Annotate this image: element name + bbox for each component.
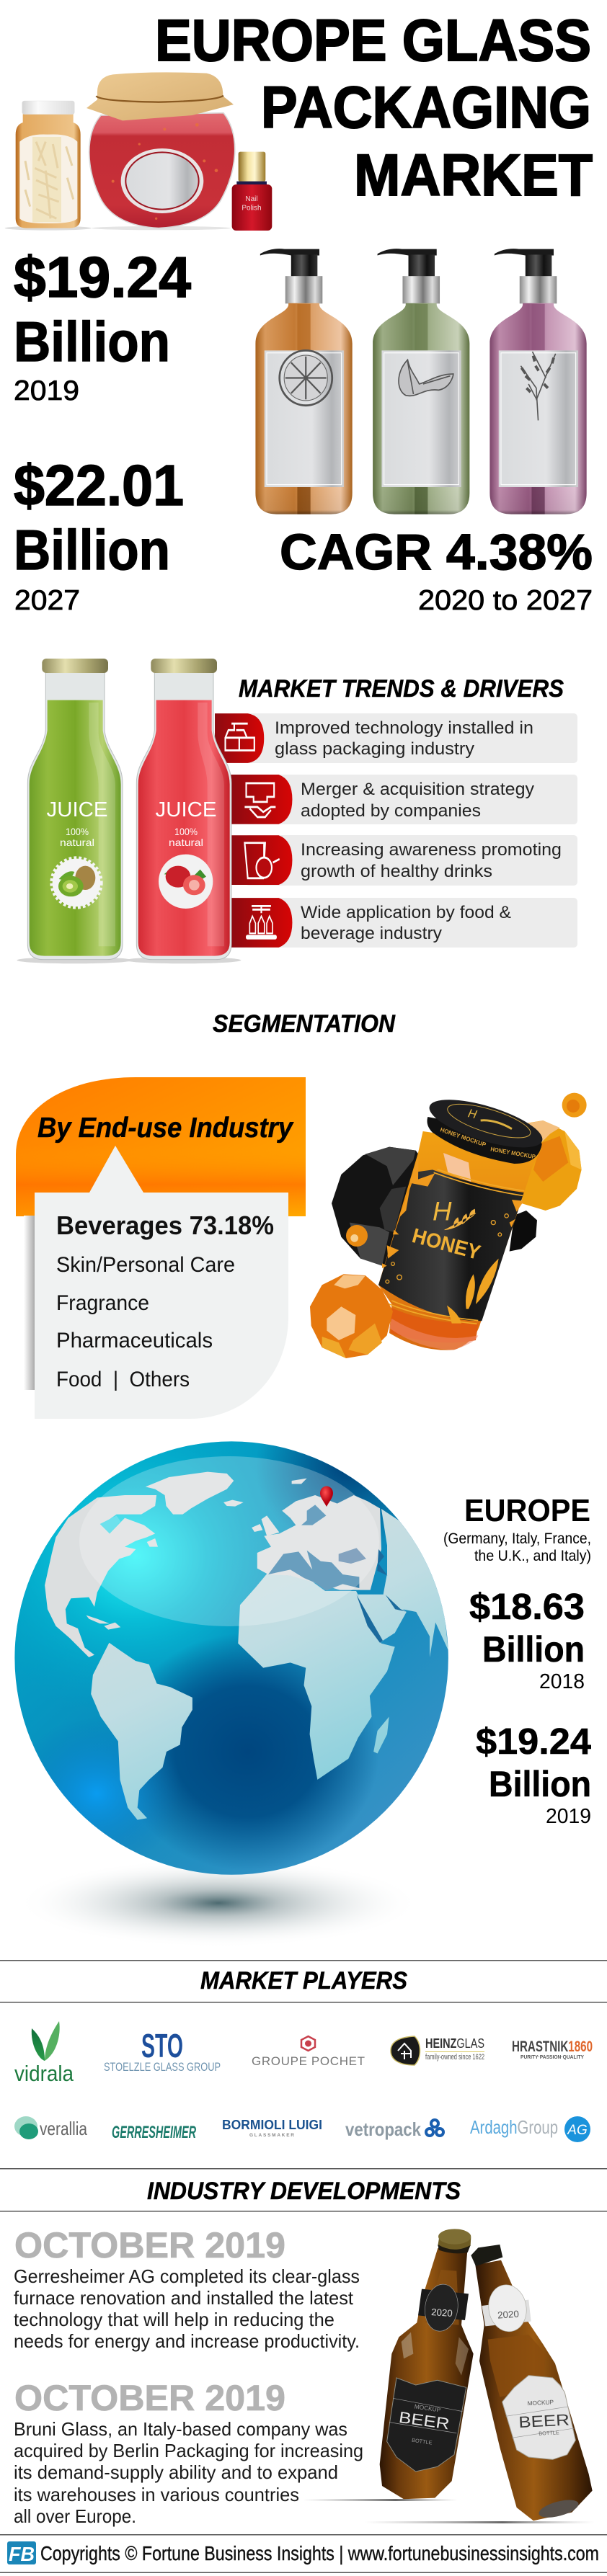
label: green juice text: natural: [60, 837, 94, 848]
driver row 3: growth of healthy drinks: [301, 862, 492, 881]
illustration: nail polish: Nail: [245, 195, 258, 203]
panel: development 2: its demand-supply ability and to expand: [14, 2461, 338, 2483]
jar label: H: [433, 1196, 452, 1226]
logo: vidrala: [14, 2021, 74, 2086]
label: red juice text: [156, 798, 216, 848]
jar label: [378, 1154, 524, 1324]
heading: market trends and drivers: MARKET TRENDS & DRIVERS: [239, 675, 564, 703]
logo: heinz glas: family-owned since 1622: [425, 2053, 484, 2062]
stat: 2027 market value: $22.01: [14, 453, 184, 517]
logo: bormioli luigi: BORMIOLI LUIGI: [222, 2118, 322, 2132]
highlight: [79, 1456, 379, 1626]
icon: bottling conveyor: [231, 898, 292, 948]
icon: glass and apple: [231, 835, 292, 885]
driver row 2: Merger & acquisition strategy: [301, 780, 534, 799]
logo: bormioli luigi: GLASSMAKER: [249, 2133, 294, 2138]
driver row 1: glass packaging industry: [275, 739, 474, 759]
panel: development 1: Gerresheimer AG completed its clear-glass: [14, 2265, 360, 2287]
label: red juice text: 100%: [174, 826, 198, 837]
logo: stoelzle: [104, 2027, 221, 2074]
illustration: red juice bottle: [125, 659, 241, 963]
2019 value: 2019: [546, 1805, 591, 1828]
illustration: pill bottle: [5, 101, 92, 231]
2019 value: Billion: [489, 1764, 591, 1804]
panel: development 1: needs for energy and increase productivity.: [14, 2330, 360, 2352]
panel: development 2: OCTOBER 2019: [14, 2378, 285, 2418]
logo: ardagh group: AG: [567, 2123, 588, 2138]
logo: ardagh group: ArdaghGroup: [470, 2116, 558, 2138]
segment list: Beverages 73.18%: [56, 1211, 274, 1240]
white card with pointer: [35, 1146, 288, 1419]
illustration: black label beer bottle: 2020: [431, 2307, 453, 2319]
segment list: Food | Others: [56, 1368, 190, 1391]
neck label: [418, 2289, 469, 2320]
label: green juice text: [46, 798, 108, 848]
stat: CAGR: [280, 524, 593, 616]
stat: 2019 market value: Billion: [14, 310, 170, 373]
heading: segmentation: SEGMENTATION: [213, 1010, 396, 1038]
map: continents south: [91, 1509, 448, 1820]
text: europe stats: [443, 1493, 592, 1828]
logo: vidrala: vidrala: [14, 2061, 74, 2086]
jar lid: [425, 1090, 547, 1164]
2018 value: Billion: [482, 1629, 585, 1670]
stat: 2019 market value: 2019: [14, 375, 79, 406]
main label: [502, 2376, 575, 2459]
2019 value: [476, 1721, 592, 1828]
stat: 2019 market value: $19.24: [14, 245, 192, 309]
illustration: green juice bottle: [17, 659, 132, 963]
illustration: white label beer bottle: MOCKUP: [527, 2398, 554, 2407]
region name: the U.K., and Italy): [474, 1548, 591, 1564]
panel: trends and drivers list: [215, 713, 577, 948]
icon: handshake puzzle: [231, 775, 292, 824]
label dots: [386, 1214, 508, 1283]
logo: verallia: verallia: [40, 2118, 87, 2139]
segment list: Skin/Personal Care: [56, 1253, 235, 1277]
icon: bottle and box: [215, 713, 264, 763]
stat: 2027 market value: Billion: [14, 518, 170, 581]
illustration: bottle shadows: [303, 2499, 595, 2523]
logo: stoelzle: STO: [141, 2027, 183, 2064]
jar glass: [378, 1131, 542, 1350]
label: green juice text: JUICE: [46, 798, 108, 821]
illustration: black label beer bottle: [380, 2229, 474, 2499]
stat: 2027 market value: [14, 453, 184, 616]
illustration: black label beer bottle: BOTTLE: [412, 2437, 433, 2446]
illustration: white label beer bottle: [471, 2245, 593, 2521]
panel: market player logos: [14, 2021, 593, 2142]
panel: development 2: [14, 2378, 363, 2527]
title: MARKET: [354, 143, 593, 208]
illustration: nail polish: Polish: [242, 205, 262, 213]
main label: [387, 2378, 466, 2472]
segment list: [56, 1211, 274, 1391]
label: red juice text: JUICE: [156, 798, 216, 821]
logo: groupe pochet: GROUPE POCHET: [252, 2054, 365, 2068]
stat: 2027 market value: 2027: [14, 585, 80, 616]
panel: development 1: OCTOBER 2019: [14, 2225, 285, 2265]
illustration: globe shadow: [17, 1858, 420, 1948]
2018 value: [469, 1586, 585, 1693]
2018 value: $18.63: [469, 1586, 585, 1627]
black gem: [332, 1147, 423, 1266]
illustration: amber pump bottle: [255, 249, 353, 514]
stat: 2019 market value: [14, 245, 192, 406]
footer: [7, 2541, 599, 2565]
panel: development 1: [14, 2225, 360, 2352]
logo: bormioli luigi: [222, 2118, 322, 2138]
right amber gem: [521, 1120, 582, 1211]
illustration: honey jar and gems: [310, 1090, 587, 1358]
title: [155, 8, 593, 208]
driver row 2: [231, 775, 577, 824]
stat: CAGR: 2020 to 2027: [418, 585, 593, 616]
illustration: black label beer bottle: MOCKUP: [414, 2403, 441, 2414]
small amber gem: [562, 1093, 587, 1118]
illustration: white label beer bottle: BEER: [518, 2410, 570, 2431]
illustration: purple pump bottle: [489, 249, 587, 514]
map: seas: [100, 1515, 120, 1533]
jar lid: HONEY MOCKUP: [439, 1126, 487, 1149]
logo: vetropack: vetropack: [345, 2118, 421, 2140]
illustration: green pump bottle: [373, 249, 469, 514]
jam speckles: [112, 123, 218, 220]
bottom amber gem: [310, 1274, 393, 1358]
small black gem: [510, 1211, 537, 1252]
driver row 4: [231, 898, 577, 948]
panel: by end-use industry: [16, 1077, 306, 1419]
panel: development 1: furnace renovation and installed the latest: [14, 2287, 354, 2309]
illustration: jam jar: [87, 72, 235, 230]
illustration: white label beer bottle: 2020: [497, 2309, 519, 2321]
illustration: globe: [14, 1441, 448, 1875]
heading: industry developments: INDUSTRY DEVELOPMENTS: [147, 2178, 461, 2205]
label: green juice text: 100%: [66, 826, 89, 837]
label: red juice text: natural: [169, 837, 203, 848]
jar lid: HONEY MOCKUP: [490, 1145, 536, 1160]
grey card shadow: [24, 1216, 35, 1390]
logo: heinz glas: [391, 2036, 484, 2065]
jar label: HONEY: [409, 1224, 483, 1265]
driver row 1: [215, 713, 577, 763]
driver row 1: Improved technology installed in: [275, 718, 533, 738]
panel: development 2: Bruni Glass, an Italy-based company was: [14, 2418, 347, 2440]
panel: development 2: its warehouses in various countries: [14, 2484, 299, 2505]
icon: company logo: FB: [9, 2543, 35, 2565]
driver row 3: [231, 835, 577, 886]
2018 value: 2018: [539, 1670, 585, 1693]
driver row 4: beverage industry: [301, 924, 442, 943]
ocean and southern land: [14, 1441, 448, 1875]
region name: (Germany, Italy, France,: [443, 1530, 591, 1547]
logo: stoelzle: STOELZLE GLASS GROUP: [104, 2060, 221, 2074]
logo: verallia: [14, 2116, 87, 2139]
panel: development 2: all over Europe.: [14, 2505, 136, 2527]
banner label: By End-use Industry: [37, 1113, 294, 1144]
segment list: Fragrance: [56, 1291, 149, 1315]
jar lid: H: [466, 1106, 479, 1122]
driver row 2: adopted by companies: [301, 801, 481, 821]
panel: development 1: technology that will help in reducing the: [14, 2309, 334, 2330]
driver row 3: Increasing awareness promoting: [301, 840, 562, 860]
map: northern land: [45, 1472, 406, 1657]
driver row 4: Wide application by food &: [301, 903, 511, 922]
stat: CAGR: CAGR 4.38%: [280, 524, 593, 580]
region name: EUROPE: [464, 1493, 590, 1528]
logo: heinz glas: HEINZGLAS: [425, 2036, 484, 2051]
logo: groupe pochet: [252, 2036, 365, 2068]
label leaves: [382, 1154, 524, 1268]
heading: market players: MARKET PLAYERS: [200, 1967, 407, 1995]
orange banner: [16, 1077, 306, 1216]
illustration: black label beer bottle: BEER: [398, 2408, 451, 2433]
logo: hrastnik: PURITY·PASSION·QUALITY: [520, 2054, 584, 2060]
illustration: white label beer bottle: BOTTLE: [539, 2429, 559, 2437]
logo: ardagh group: [470, 2116, 590, 2142]
segment list: Pharmaceuticals: [56, 1329, 213, 1352]
icon: location pin: [320, 1486, 333, 1507]
illustration: nail polish: [232, 152, 272, 231]
panel: development 2: acquired by Berlin Packaging for increasing: [14, 2440, 363, 2461]
logo: gerresheimer: GERRESHEIMER: [112, 2123, 196, 2142]
region name: [443, 1493, 591, 1564]
logo: hrastnik: HRASTNIK1860: [512, 2038, 593, 2055]
2019 value: $19.24: [476, 1721, 592, 1762]
neck label: [482, 2300, 531, 2326]
